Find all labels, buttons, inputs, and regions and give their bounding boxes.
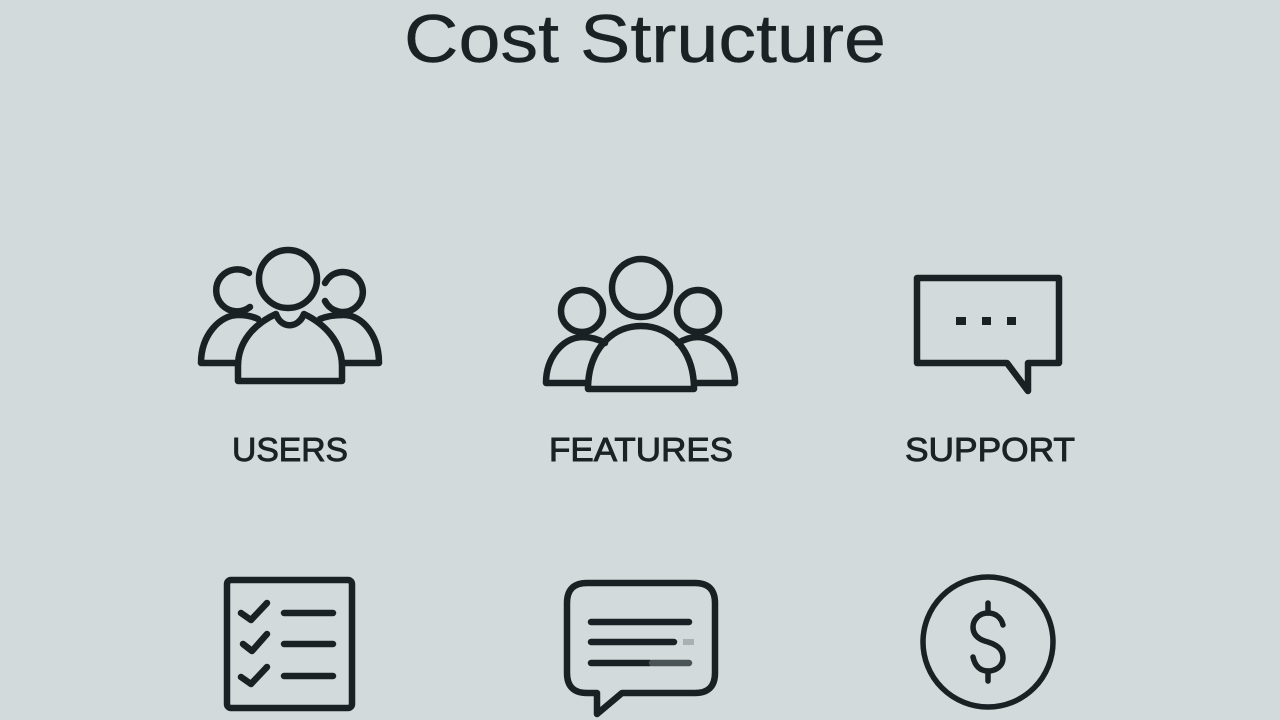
label: support: SUPPORT [905,431,1075,468]
icon: dollar coin [923,577,1053,707]
icon: users group [201,250,379,381]
title: Cost Structure [404,1,886,77]
item: support [905,278,1075,468]
icon: features group [546,259,735,389]
item: features [546,259,735,468]
icon: speech bubble with dots [917,278,1059,391]
item: users [201,250,379,468]
icon: message with text lines [567,583,715,714]
label: features: FEATURES [549,431,733,468]
label: users: USERS [232,431,348,468]
icon: checklist [227,580,352,708]
